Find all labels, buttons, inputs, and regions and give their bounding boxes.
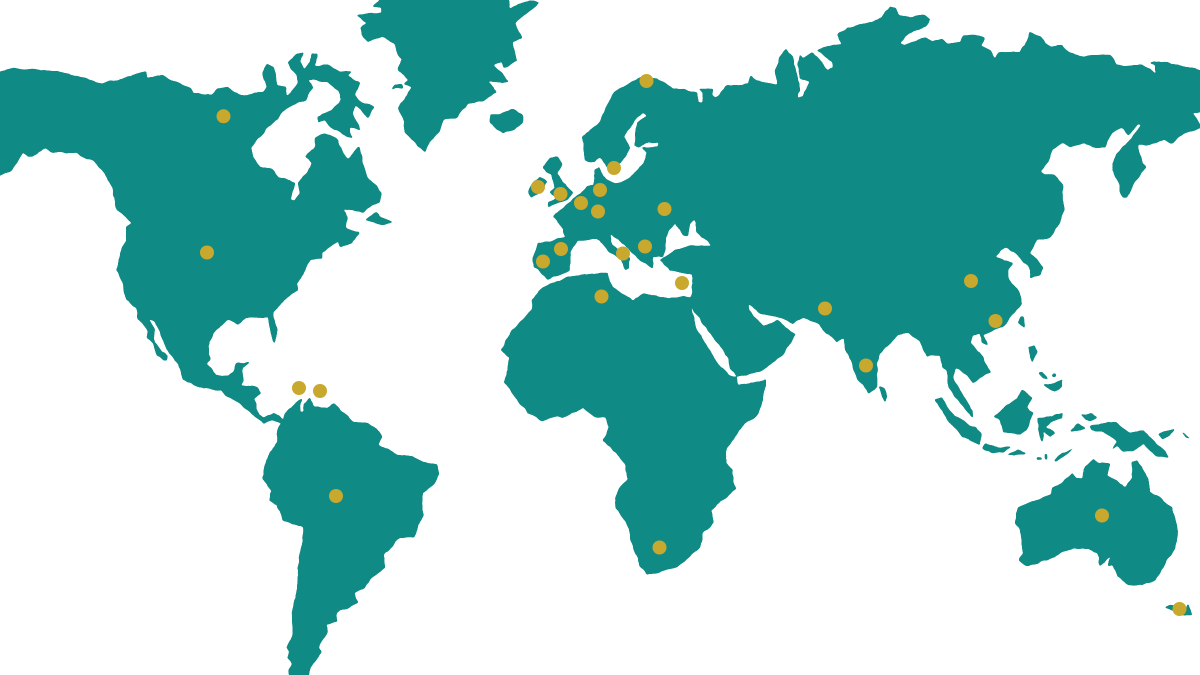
marker: northern Spain — [554, 242, 568, 256]
marker: Cyprus — [675, 276, 689, 290]
land: Africa — [501, 273, 766, 575]
marker: northern Norway — [640, 74, 654, 88]
land: Solomon islet — [1182, 433, 1191, 438]
marker: Sweden — [607, 161, 621, 175]
land: Lesser Sunda — [1007, 450, 1026, 455]
land: Iceland — [490, 109, 523, 133]
marker: southern China — [988, 314, 1002, 328]
marker: Algeria — [594, 290, 608, 304]
land: Mindanao — [1043, 380, 1063, 392]
marker: northern India — [818, 302, 832, 316]
land: Ceram — [1080, 413, 1098, 421]
marker: Brazil — [329, 489, 343, 503]
location markers — [200, 74, 1186, 616]
marker: United Kingdom — [554, 187, 568, 201]
marker: Australia — [1095, 508, 1109, 522]
land: Sumatra — [935, 398, 981, 445]
marker: United States — [200, 246, 214, 260]
marker: southern Germany — [591, 204, 605, 218]
land: Borneo — [994, 390, 1033, 434]
land: small Philippine islands — [1039, 372, 1047, 379]
marker: central China — [964, 274, 978, 288]
marker: northern Canada — [216, 109, 230, 123]
land: New Britain — [1158, 429, 1175, 438]
marker: Caribbean west — [292, 381, 306, 395]
marker: Ireland — [531, 180, 545, 194]
marker: Belgium — [574, 196, 588, 210]
land: small island west of Greenland — [393, 84, 403, 90]
land: small Philippine island — [1052, 373, 1056, 377]
marker: southern India — [859, 358, 873, 372]
land: Java — [983, 444, 1012, 452]
land: Newfoundland — [366, 212, 393, 225]
marker: Caribbean east — [313, 384, 327, 398]
marker: New Zealand — [1172, 602, 1186, 616]
land: Sulawesi — [1037, 412, 1062, 442]
marker: Portugal — [536, 254, 550, 268]
marker: Balkans — [638, 240, 652, 254]
land: Timor — [1055, 449, 1073, 461]
marker: northern Germany — [593, 183, 607, 197]
land: Taiwan — [1018, 317, 1024, 328]
land: small islands — [1037, 457, 1042, 460]
land: Ireland — [528, 177, 547, 197]
land: New Guinea — [1090, 422, 1169, 457]
land: North and Central America — [0, 52, 382, 424]
marker: Italy — [616, 246, 630, 260]
land: Sri Lanka — [879, 387, 887, 402]
marker: South Africa — [652, 540, 666, 554]
land: Greenland — [357, 0, 539, 152]
land: Eurasia — [533, 7, 1200, 417]
land: Great Britain — [543, 157, 573, 207]
marker: Ukraine — [658, 202, 672, 216]
land: New Zealand — [1165, 604, 1192, 615]
land: Buru — [1070, 423, 1085, 431]
land: small island — [1045, 454, 1047, 459]
land: South America — [262, 398, 439, 675]
land: Australia — [1015, 459, 1178, 585]
land: Luzon — [1028, 345, 1037, 363]
